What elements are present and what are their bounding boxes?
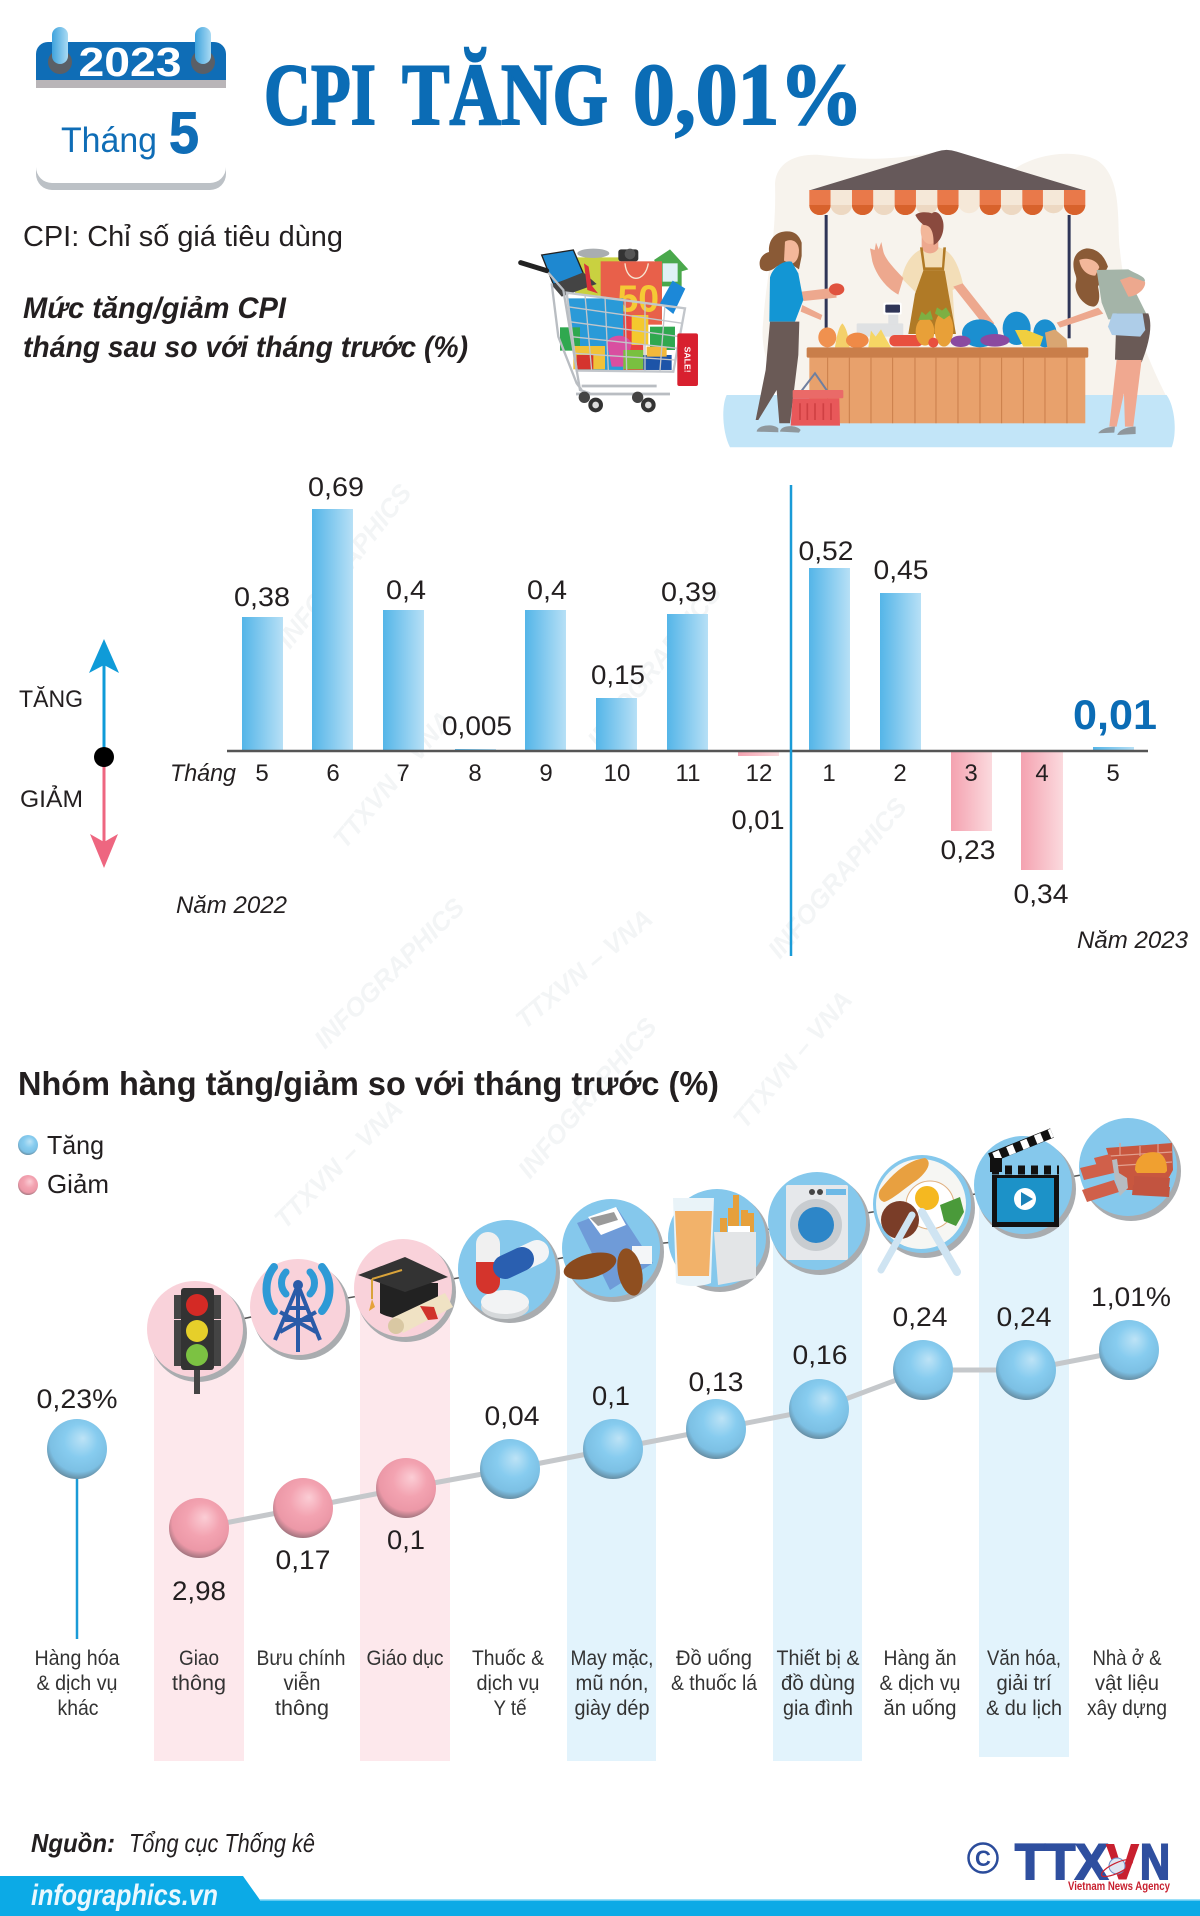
negative bars: [738, 751, 1063, 870]
illustration: market stall: [723, 150, 1175, 447]
month axis labels: 8: [468, 760, 482, 787]
bar values: 0,4: [527, 575, 567, 605]
shopping basket: [791, 373, 843, 426]
month axis labels: 2: [893, 760, 907, 787]
category labels: Nhà ở &: [1092, 1647, 1162, 1670]
month axis labels: [170, 760, 1120, 787]
sale tag text: SALE!: [683, 347, 693, 373]
ball values: 0,1: [387, 1525, 425, 1555]
month axis labels: 11: [676, 760, 700, 787]
ball values: 0,17: [276, 1545, 330, 1575]
chart subtitle: Mức tăng/giảm CPI: [23, 292, 287, 325]
icon: washing machine, household goods: [768, 1172, 870, 1275]
cart bag number: 50: [617, 278, 659, 321]
calendar badge: [36, 27, 226, 190]
ball values: 0,24: [996, 1302, 1052, 1332]
logo: TTXVN: N: [1140, 1834, 1170, 1890]
logo: TTXVN: C: [975, 1846, 991, 1871]
category labels: Bưu chính: [256, 1647, 346, 1670]
category labels: đồ dùng: [781, 1672, 855, 1695]
source: [31, 1828, 315, 1858]
ball values: 0,1: [592, 1381, 630, 1411]
ball values: 0,24: [892, 1302, 948, 1332]
bar values: 0,52: [798, 536, 854, 566]
category labels: giày dép: [574, 1697, 650, 1720]
watermarks: INFOGRAPHICS: [762, 791, 913, 964]
category labels: & du lịch: [986, 1697, 1062, 1720]
source: Nguồn:: [31, 1828, 115, 1858]
icon: medicine capsules: [458, 1220, 560, 1323]
definition text: CPI: Chỉ số giá tiêu dùng: [23, 221, 343, 253]
title: TĂNG: [402, 47, 608, 144]
bar values: 0,23: [940, 835, 996, 865]
month axis labels: 9: [539, 760, 553, 787]
category labels: & dịch vụ: [880, 1672, 960, 1695]
category labels: Thuốc &: [472, 1647, 544, 1670]
chart subtitle: tháng sau so với tháng trước (%): [23, 331, 468, 364]
title: CPI: [264, 47, 376, 144]
category labels: Y tế: [494, 1697, 527, 1720]
month axis labels: 3: [964, 760, 978, 787]
bar values: 0,34: [1014, 879, 1068, 909]
category labels: Giao: [179, 1647, 219, 1670]
bar values: 0,4: [386, 575, 426, 605]
footer band: infographics.vn: [31, 1879, 218, 1912]
legend: Tăng: [47, 1130, 104, 1160]
logo: TTXVN: TTX: [1015, 1834, 1108, 1890]
source: Tổng cục Thống kê: [129, 1828, 315, 1858]
watermarks: INFOGRAPHICS: [271, 478, 418, 654]
month axis labels: 10: [604, 760, 630, 787]
shopper left: [756, 231, 844, 433]
bar values: 0,01: [732, 805, 784, 835]
category highlight strips: [154, 1185, 1069, 1761]
icon: film clapperboard, entertainment: [974, 1133, 1076, 1239]
logo: TTXVN: [968, 1834, 1170, 1893]
month axis labels: Tháng: [170, 760, 237, 787]
vendor: [870, 212, 994, 334]
chart subtitle: [23, 292, 468, 364]
watermarks: TTXVN – VNA: [268, 1094, 409, 1234]
category labels: & dịch vụ: [36, 1672, 118, 1695]
month axis labels: 5: [255, 760, 269, 787]
title: 0,01%: [633, 47, 863, 144]
bar values: 0,01: [1073, 691, 1157, 738]
month axis labels: 5: [1106, 760, 1120, 787]
category labels: thông: [275, 1697, 329, 1720]
month axis labels: 4: [1035, 760, 1049, 787]
category labels: Thiết bị &: [776, 1647, 860, 1670]
bar values: 0,005: [442, 711, 512, 741]
line and ball chart: goods groups: [36, 1282, 1171, 1639]
icon: drink and cigarettes: [668, 1189, 770, 1292]
watermarks: INFOGRAPHICS: [581, 578, 728, 754]
category labels: mũ nón,: [576, 1672, 648, 1695]
month axis labels: 7: [396, 760, 410, 787]
category labels: viễn: [284, 1672, 320, 1695]
watermarks: TTXVN – VNA: [327, 705, 458, 854]
category labels: Giáo dục: [366, 1647, 444, 1670]
footer band: [0, 1876, 1200, 1916]
ball values: 1,01%: [1091, 1282, 1171, 1312]
logo: TTXVN: V: [1106, 1834, 1140, 1890]
category labels: gia đình: [783, 1697, 853, 1720]
calendar badge: 5: [169, 101, 199, 166]
watermarks: INFOGRAPHICS: [308, 892, 471, 1054]
category labels: & thuốc lá: [671, 1672, 757, 1695]
category labels: thông: [172, 1672, 226, 1695]
register: [857, 303, 903, 337]
ball values: 0,23%: [36, 1384, 118, 1414]
category labels: Hàng ăn: [884, 1647, 956, 1670]
direction key: up and down arrows: GIẢM: [20, 784, 83, 813]
ball values: 0,04: [484, 1401, 540, 1431]
positive bars: [242, 509, 1134, 751]
watermarks: INFOGRAPHICS: [512, 1011, 663, 1184]
month axis labels: 6: [326, 760, 340, 787]
bar values: 0,39: [661, 577, 717, 607]
watermarks: TTXVN – VNA: [510, 903, 658, 1035]
category labels: giải trí: [996, 1672, 1052, 1695]
calendar year: 2023: [78, 39, 182, 85]
calendar badge: Tháng: [61, 121, 157, 160]
title: [264, 47, 863, 144]
category labels: vật liệu: [1095, 1672, 1159, 1695]
ball values: 0,13: [688, 1367, 744, 1397]
icon: shirt and shoes, clothing: [561, 1199, 664, 1302]
icon: plate of food: [873, 1155, 975, 1272]
year label 2022: Năm 2022: [176, 892, 287, 919]
produce: [818, 307, 1067, 348]
ball values: 2,98: [172, 1576, 226, 1606]
category labels: dịch vụ: [476, 1672, 540, 1695]
ball values: [36, 1282, 1171, 1606]
icon: radio tower, telecoms: [250, 1259, 350, 1360]
logo: TTXVN: Vietnam News Agency: [1068, 1879, 1170, 1893]
watermarks: TTXVN – VNA: [727, 985, 858, 1134]
legend: Giảm: [47, 1169, 109, 1199]
icon: traffic light, transport: [147, 1281, 247, 1394]
month axis labels: 12: [746, 760, 772, 787]
watermarks: [268, 478, 913, 1234]
bar values: 0,45: [874, 555, 928, 585]
category labels: May mặc,: [570, 1647, 654, 1670]
bar values: 0,69: [308, 472, 364, 502]
direction key: up and down arrows: [19, 639, 119, 868]
category labels: xây dựng: [1087, 1697, 1167, 1720]
category labels: Đồ uống: [676, 1647, 752, 1670]
icon: bricks and helmet, housing: [1079, 1118, 1181, 1221]
category labels: Văn hóa,: [987, 1647, 1061, 1670]
category labels: [34, 1647, 1167, 1720]
illustration: shopping cart: [521, 249, 698, 412]
legend: [18, 1130, 109, 1199]
bar values: 0,38: [234, 582, 290, 612]
ball values: 0,16: [792, 1340, 848, 1370]
section heading: Nhóm hàng tăng/giảm so với tháng trước (%): [18, 1065, 719, 1102]
shopper right: [1057, 248, 1150, 435]
year label 2023: Năm 2023: [1077, 927, 1189, 954]
category labels: Hàng hóa: [34, 1647, 120, 1670]
bar chart: monthly CPI: [170, 472, 1189, 956]
bar values: [234, 472, 1157, 909]
icon: graduation cap, education: [354, 1239, 456, 1342]
direction key: up and down arrows: TĂNG: [19, 686, 83, 713]
bar values: 0,15: [591, 660, 645, 690]
category labels: ăn uống: [884, 1697, 956, 1720]
category labels: khác: [58, 1697, 98, 1720]
month axis labels: 1: [822, 760, 836, 787]
